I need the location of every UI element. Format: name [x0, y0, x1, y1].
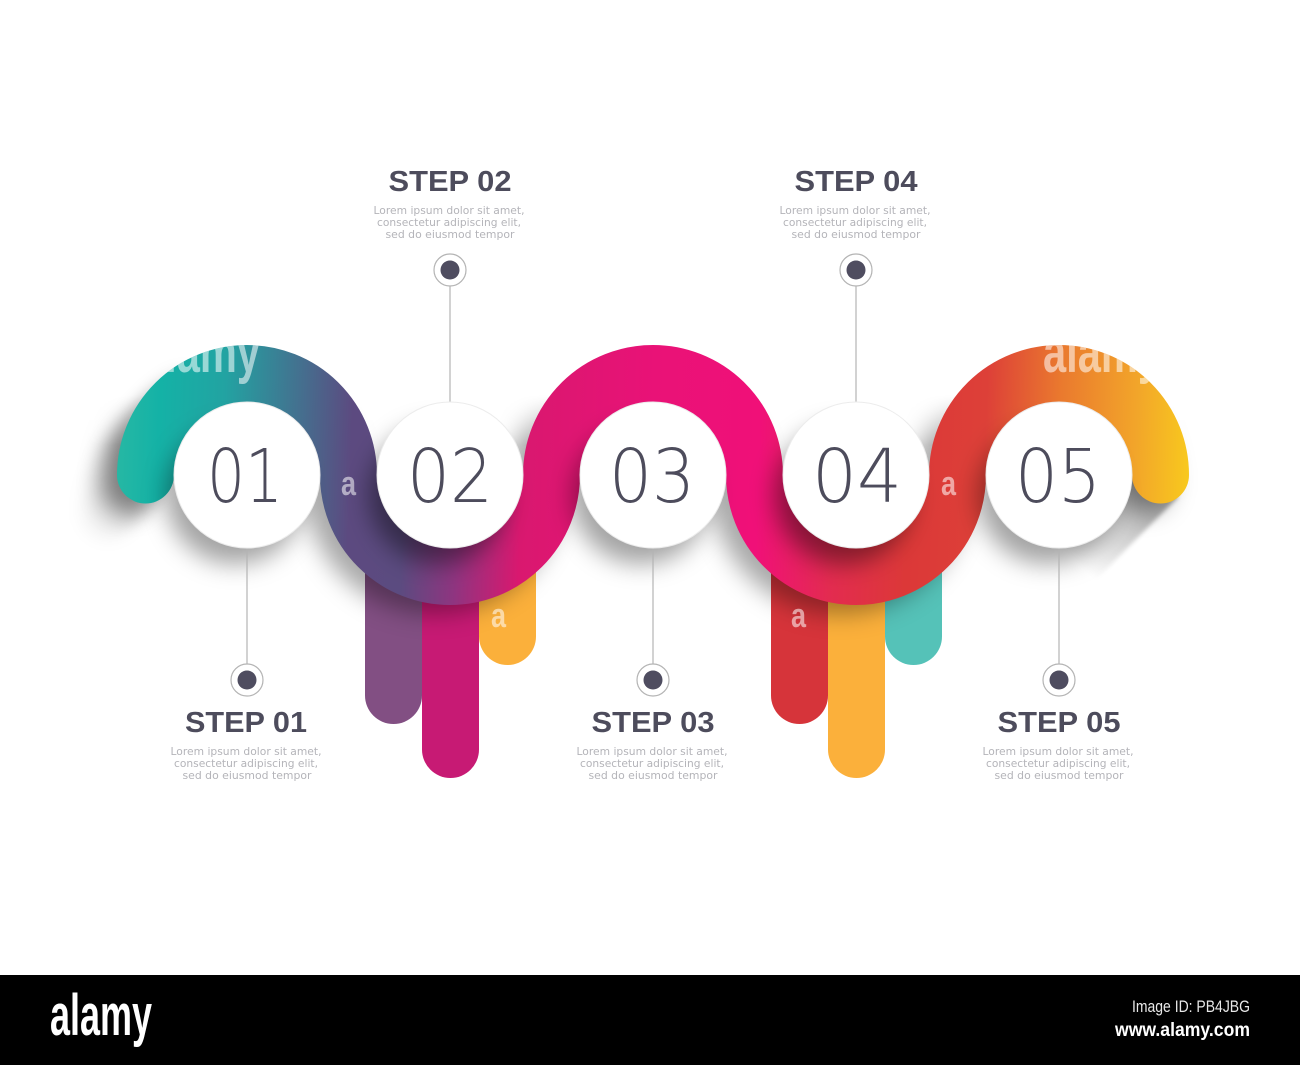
text block: step 03: [576, 707, 728, 782]
text block: step 02: consectetur adipiscing elit,: [377, 217, 521, 229]
marker dot 05: [1043, 664, 1075, 696]
watermark letters: a: [791, 597, 807, 635]
text block: step 03: consectetur adipiscing elit,: [580, 758, 724, 770]
drip: amber right: [828, 540, 885, 778]
text block: step 01: [170, 707, 322, 782]
text block: step 04: consectetur adipiscing elit,: [783, 217, 927, 229]
watermark letters: a: [341, 465, 357, 503]
text block: step 05: [982, 707, 1134, 782]
text block: step 02: STEP 02: [388, 166, 512, 198]
footer logo: alamy: [50, 983, 152, 1048]
text block: step 01: Lorem ipsum dolor sit amet,: [170, 746, 322, 758]
drips: coloured bars below the ribbon: [365, 540, 942, 778]
text block: step 05: sed do eiusmod tempor: [994, 770, 1124, 782]
text block: step 02: Lorem ipsum dolor sit amet,: [374, 205, 524, 217]
text block: step 05: STEP 05: [998, 707, 1120, 739]
step 03 circle: 03: [609, 434, 695, 520]
drip: purple: [365, 540, 422, 724]
text block: step 02: sed do eiusmod tempor: [386, 229, 515, 241]
text block: step 05: Lorem ipsum dolor sit amet,: [982, 746, 1134, 758]
text block: step 03: STEP 03: [592, 707, 714, 739]
step 05 circle: [986, 402, 1132, 548]
step 04 circle: [783, 402, 929, 548]
step 02 circle: 02: [407, 434, 493, 520]
text block: step 04: Lorem ipsum dolor sit amet,: [780, 205, 930, 217]
step 02 circle: [377, 402, 523, 548]
step 05 circle: 05: [1015, 434, 1101, 520]
text block: step 03: sed do eiusmod tempor: [588, 770, 718, 782]
ribbon shadow: [130, 384, 1144, 586]
website: www.alamy.com: [1114, 1020, 1250, 1041]
step 01 circle: 01: [207, 434, 283, 520]
drip: red: [771, 540, 828, 724]
text block: step 01: consectetur adipiscing elit,: [174, 758, 318, 770]
step 04 circle: 04: [812, 434, 902, 520]
long shadow from left ribbon end: [108, 398, 183, 513]
watermark letters: a: [941, 465, 957, 503]
step 03 circle: [580, 402, 726, 548]
wave ribbon: [146, 374, 1160, 576]
text block: step 03: Lorem ipsum dolor sit amet,: [576, 746, 728, 758]
drip: amber left: [479, 540, 536, 665]
marker dot 03: [637, 664, 669, 696]
text block: step 05: consectetur adipiscing elit,: [986, 758, 1130, 770]
connector lines: [247, 286, 1059, 664]
text block: step 04: [780, 166, 930, 241]
text block: step 02: [374, 166, 524, 241]
text block: step 04: STEP 04: [794, 166, 918, 198]
text block: step 04: sed do eiusmod tempor: [792, 229, 921, 241]
drip: teal: [885, 540, 942, 665]
watermark letters: a: [491, 597, 507, 635]
image id: Image ID: PB4JBG: [1132, 997, 1250, 1016]
ribbon watermark words: alamy: [142, 320, 260, 385]
text block: step 01: sed do eiusmod tempor: [182, 770, 312, 782]
ribbon watermark words: alamy: [1043, 320, 1161, 385]
drip: magenta: [422, 540, 479, 778]
footer band: [0, 975, 1300, 1065]
marker dot 01: [231, 664, 263, 696]
marker dot 02: [434, 254, 466, 286]
text block: step 01: STEP 01: [185, 707, 307, 739]
long shadow from right ribbon end: [1075, 477, 1158, 560]
watermark letters: [341, 465, 957, 635]
step 01 circle: [174, 402, 320, 548]
ribbon watermark words: [168, 345, 1149, 384]
marker dot 04: [840, 254, 872, 286]
circle shadows: [166, 426, 1116, 564]
